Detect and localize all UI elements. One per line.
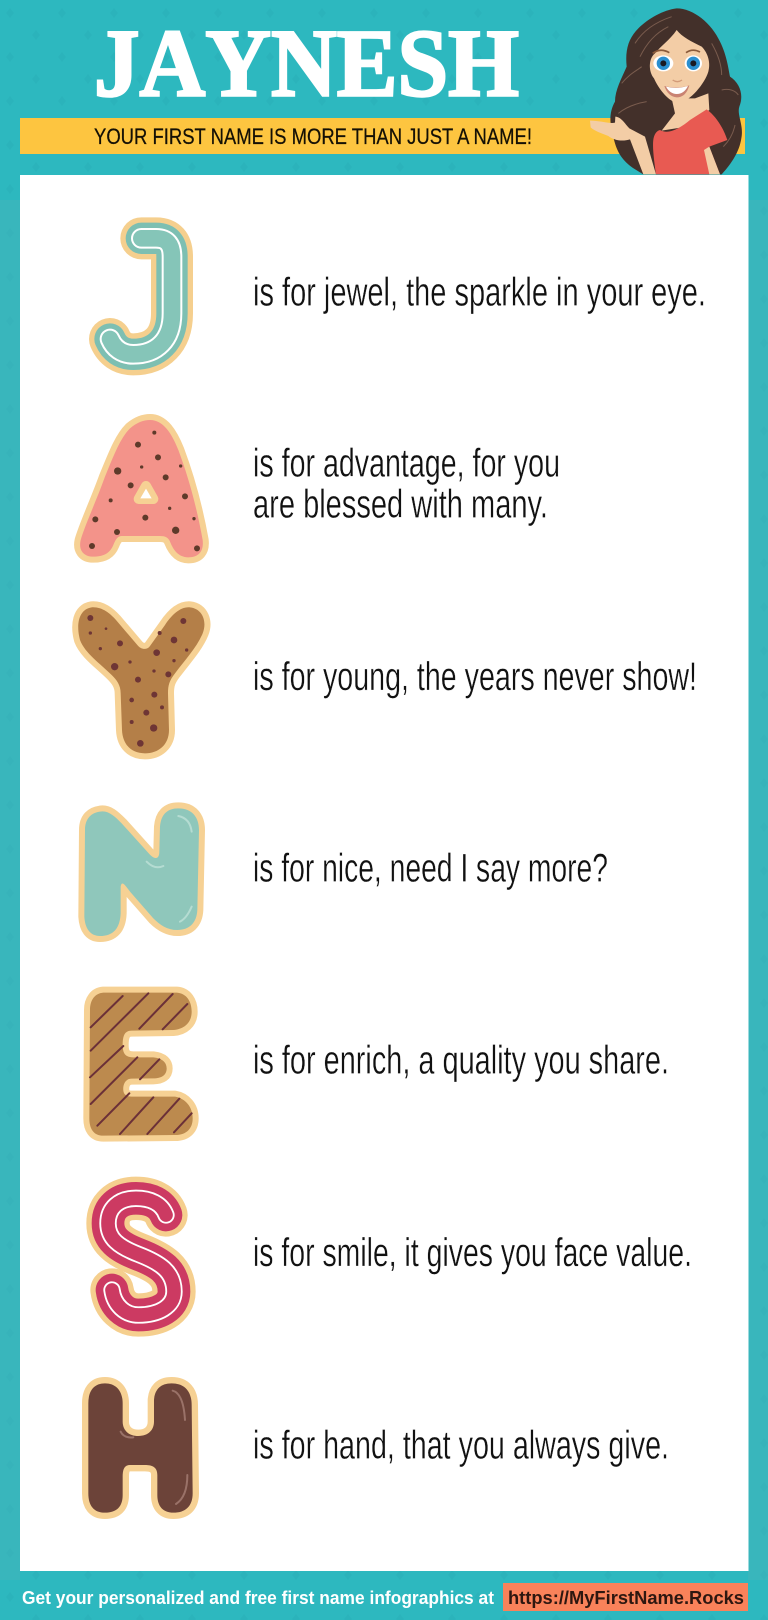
icon: cookie letter J (110, 238, 172, 354)
text: A (253, 442, 560, 526)
icon: cookie letter H (88, 1383, 193, 1513)
footer text: Get your personalized and free first name infographics at (22, 1588, 494, 1608)
row: N (84, 808, 608, 936)
row: Y (78, 607, 697, 753)
text: A: is for advantage, for you (253, 442, 560, 486)
icon: cookie letter E (89, 993, 193, 1136)
row: A (80, 420, 560, 557)
icon: cookie letter Y (78, 607, 204, 753)
row: E (89, 993, 669, 1136)
text: A: are blessed with many. (253, 482, 548, 526)
banner text: YOUR FIRST NAME IS MORE THAN JUST A NAME! (94, 124, 532, 149)
footer link box: https://MyFirstName.Rocks (508, 1588, 744, 1608)
icon: cookie letter S (108, 1198, 174, 1315)
row: H (88, 1383, 669, 1513)
illustration: woman (590, 8, 742, 174)
icon: cookie letter N (84, 808, 199, 936)
title: JAYNESH (94, 10, 519, 116)
banner (20, 118, 745, 154)
row: S (108, 1198, 692, 1315)
text: N: is for nice, need I say more? (253, 846, 608, 890)
footer link box (503, 1583, 748, 1611)
row: J (110, 238, 706, 354)
icon: cookie letter A (80, 420, 203, 557)
